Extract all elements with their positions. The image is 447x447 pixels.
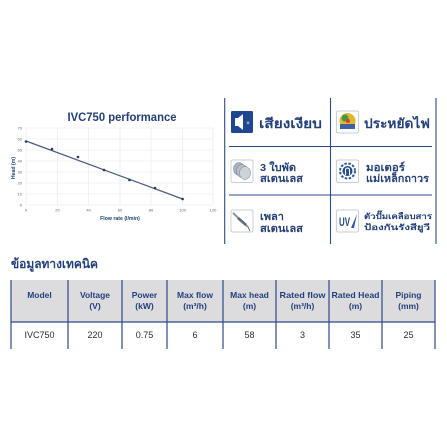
icon: muted speaker: × (246, 121, 250, 127)
spec table (11, 280, 435, 349)
table header labels: Power (132, 290, 158, 300)
feature: permanent magnet motor: มอเตอร์ (366, 161, 405, 174)
feature grid lines (225, 98, 436, 244)
table header labels: Voltage (80, 290, 110, 300)
line chart: Head (m) (11, 157, 17, 179)
table header labels: (m) (243, 301, 256, 311)
table values: 25 (403, 330, 414, 340)
line chart: 30 (18, 170, 23, 174)
icon: shaft (231, 210, 253, 232)
table header labels: (m) (349, 301, 362, 311)
table header labels: (kW) (135, 301, 154, 311)
line chart: 80 (149, 208, 154, 212)
line chart: 10 (18, 192, 23, 196)
feature: UV coating: ป้องกันรังสียูวี (364, 222, 431, 233)
line chart: 0 (20, 202, 23, 208)
line chart: 70 (18, 126, 23, 130)
icon: UV: UV (339, 215, 350, 229)
table header labels (27, 290, 421, 311)
feature: energy saving (336, 111, 430, 133)
feature: permanent magnet motor (336, 160, 429, 185)
table header background (11, 280, 435, 322)
table header labels: Rated Head (332, 290, 380, 300)
chart title: IVC750 performance (68, 112, 176, 124)
table header labels: (mm) (398, 301, 419, 311)
table values (24, 330, 414, 340)
table header labels: Piping (396, 290, 421, 300)
line chart: 60 (118, 208, 123, 212)
feature: UV coating (336, 210, 433, 233)
table header labels: Model (27, 290, 52, 300)
table values: 220 (87, 330, 103, 340)
icon: impeller discs (231, 160, 253, 182)
table header labels: Rated flow (280, 290, 326, 300)
icon: energy label (336, 111, 358, 133)
feature: UV coating: ตัวปั๊มเคลือบสาร (364, 210, 433, 221)
table header labels: Max head (230, 290, 269, 300)
feature: three stainless impellers (231, 160, 304, 185)
table values: 0.75 (136, 330, 153, 340)
line chart: 100 (179, 208, 187, 212)
icon: motor gear (336, 160, 358, 182)
feature: stainless shaft: เพลา (260, 211, 284, 223)
feature: stainless shaft: สเตนเลส (260, 223, 304, 235)
line chart: Flow rate (l/min) (100, 216, 140, 222)
table header labels: (m³/h) (183, 301, 207, 311)
table values: 3 (300, 330, 305, 340)
line chart: 120 (210, 208, 217, 212)
table header labels: (m³/h) (291, 301, 314, 311)
line chart: 0 (25, 208, 28, 212)
line chart: 40 (86, 208, 92, 212)
table values: 35 (350, 330, 361, 340)
table values: 6 (192, 330, 198, 340)
table values: IVC750 (24, 330, 55, 340)
feature: quiet sound (231, 111, 322, 133)
line chart: 60 (18, 136, 23, 142)
feature: stainless shaft (231, 210, 304, 235)
table header labels: (V) (89, 301, 101, 311)
feature: three stainless impellers: 3 ใบพัด (260, 160, 296, 174)
line chart: 50 (18, 148, 23, 152)
line chart: 20 (55, 208, 60, 212)
table header labels: Max flow (177, 290, 213, 300)
line chart: 40 (18, 158, 23, 164)
line chart (11, 126, 217, 222)
section heading: ข้อมูลทางเทคนิค (11, 257, 98, 272)
table values: 58 (244, 330, 255, 340)
feature: quiet sound: เสียงเงียบ (259, 116, 322, 131)
feature: energy saving: ประหยัดไฟ (364, 115, 430, 131)
line chart: 20 (18, 180, 23, 186)
feature: three stainless impellers: สเตนเลส (260, 173, 304, 185)
feature: permanent magnet motor: แม่เหล็กถาวร (366, 171, 429, 185)
